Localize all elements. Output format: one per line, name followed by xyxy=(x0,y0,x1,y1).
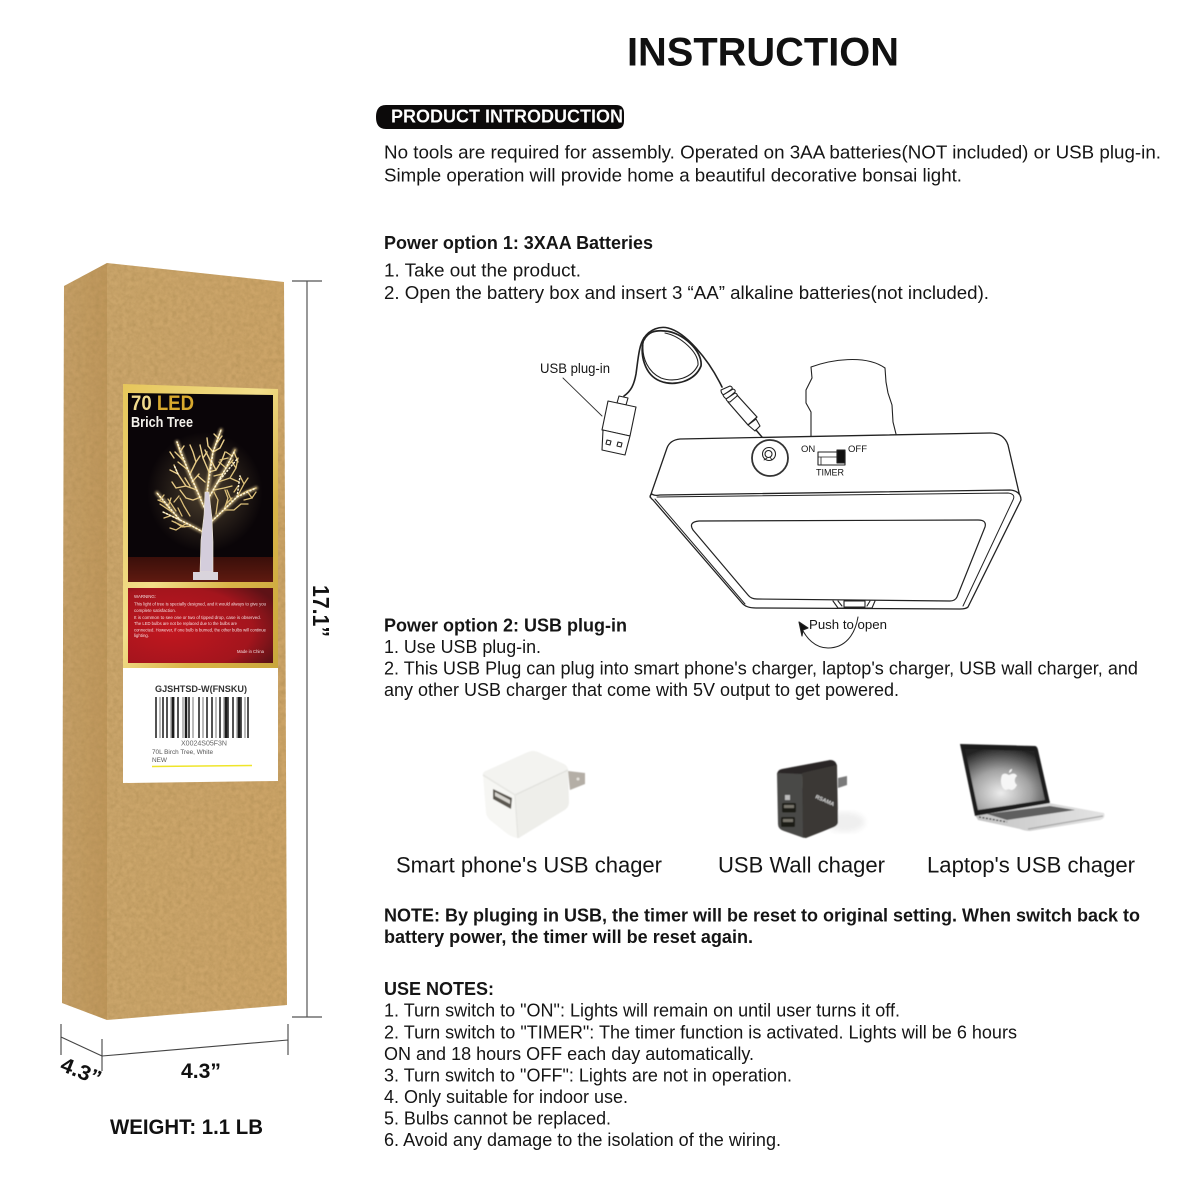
arrow: push to open xyxy=(799,617,887,648)
arrow: push to open: Push to open xyxy=(809,617,887,632)
box label: black tree photo: 70 LED xyxy=(131,392,194,415)
dimension: height 17.1 inches: 17.1” xyxy=(308,585,334,637)
switch: on off timer xyxy=(801,444,867,478)
battery door panel xyxy=(691,520,985,601)
switch: on off timer: ON xyxy=(801,444,815,455)
charger captions: USB Wall chager xyxy=(718,852,885,878)
box label: red warning panel: It is common to see one or two of tipped drop, case is observed. xyxy=(134,615,261,620)
switch: on off timer: OFF xyxy=(848,444,867,455)
dimension: width 4.3 inches xyxy=(102,1024,288,1083)
note xyxy=(384,906,1140,947)
use notes: 2. Turn switch to "TIMER": The timer function is activated. Lights will be 6 hours xyxy=(384,1022,1017,1042)
weight label: WEIGHT: 1.1 LB xyxy=(110,1116,263,1139)
section heading: product introduction: PRODUCT INTRODUCTION xyxy=(391,106,623,126)
icon: laptop xyxy=(960,744,1104,831)
diagram: battery box with USB cable xyxy=(540,327,1021,648)
icon: white phone charger xyxy=(483,751,585,838)
box label: red warning panel: WARNING: xyxy=(134,594,156,599)
text block: power option 2: 2. This USB Plug can plug into smart phone's charger, laptop's charger, USB wall charger, and xyxy=(384,658,1138,678)
text block: power option 2: any other USB charger that come with 5V output to get powered. xyxy=(384,680,899,700)
dimension: depth 4.3 inches xyxy=(57,1024,105,1090)
box label: black tree photo: Brich Tree xyxy=(131,414,193,431)
box label: FNSKU barcode sticker xyxy=(123,668,278,783)
text block: product introduction: No tools are required for assembly. Operated on 3AA batteries(NOT included) or USB plug-in. xyxy=(384,142,1161,162)
charger captions xyxy=(396,852,1135,878)
use notes xyxy=(384,979,1017,1150)
use notes: 4. Only suitable for indoor use. xyxy=(384,1087,628,1107)
barcode xyxy=(156,697,248,738)
use notes: ON and 18 hours OFF each day automatically. xyxy=(384,1044,754,1064)
switch: on off timer: TIMER xyxy=(816,468,844,478)
charger captions: Laptop's USB chager xyxy=(927,852,1135,878)
cable coil xyxy=(624,327,722,396)
box label: red warning panel: This light of tree is specially designed, and it would always to give you xyxy=(134,602,267,606)
box label: red warning panel: lighting. xyxy=(134,633,149,638)
text block: power option 2: Power option 2: USB plug-in xyxy=(384,614,627,636)
title: INSTRUCTION xyxy=(627,30,899,74)
dimension: height 17.1 inches xyxy=(292,281,334,1017)
label: USB plug-in: USB plug-in xyxy=(540,361,610,376)
box label: FNSKU barcode sticker: X0024S05F3N xyxy=(181,740,227,748)
door clip xyxy=(833,601,875,608)
icon: USB plug xyxy=(602,396,636,455)
text block: power option 2: 1. Use USB plug-in. xyxy=(384,637,541,657)
box label: red warning panel xyxy=(128,588,273,663)
box label: black tree photo xyxy=(128,392,273,582)
use notes: 6. Avoid any damage to the isolation of the wiring. xyxy=(384,1130,781,1150)
icon: DC socket xyxy=(752,440,788,476)
box label: FNSKU barcode sticker: 70L Birch Tree, White xyxy=(152,750,214,756)
box label: FNSKU barcode sticker: GJSHTSD-W(FNSKU) xyxy=(155,684,247,694)
tree illustration xyxy=(157,430,256,580)
text block: power option 1 xyxy=(384,233,989,303)
text block: power option 1: 1. Take out the product. xyxy=(384,260,581,280)
note: NOTE: By pluging in USB, the timer will be reset to original setting. When switch back to xyxy=(384,906,1140,926)
dimension: depth 4.3 inches: 4.3” xyxy=(57,1053,105,1090)
use notes: USE NOTES: xyxy=(384,979,494,999)
box label: FNSKU barcode sticker: NEW xyxy=(152,758,167,764)
icon: black wall charger xyxy=(777,760,865,838)
label: USB plug-in xyxy=(540,361,610,416)
icon: DC plug xyxy=(721,386,767,443)
charger captions: Smart phone's USB chager xyxy=(396,852,662,878)
tree base stump xyxy=(806,360,896,436)
box label: red warning panel: complete satisfaction. xyxy=(134,608,176,613)
text block: product introduction xyxy=(384,142,1161,186)
text block: power option 2 xyxy=(384,614,1138,700)
icon: black wall charger: RSAMA xyxy=(814,794,835,808)
dimension: width 4.3 inches: 4.3” xyxy=(181,1060,221,1083)
text block: power option 1: Power option 1: 3XAA Batteries xyxy=(384,233,653,253)
box label: red warning panel: connected. However, if one bulb is burned, the other bulbs will continue xyxy=(134,628,267,632)
use notes: 5. Bulbs cannot be replaced. xyxy=(384,1108,611,1128)
text block: product introduction: Simple operation will provide home a beautiful decorative bonsai light. xyxy=(384,166,962,186)
box label: gold frame xyxy=(123,384,278,668)
note: battery power, the timer will be reset again. xyxy=(384,927,753,947)
kraft product box xyxy=(62,263,287,1020)
box label: red warning panel: Made in China xyxy=(237,649,265,654)
box label: red warning panel: The LED bulbs are not be replaced due to the bulbs are xyxy=(134,621,238,626)
battery box body xyxy=(650,433,1021,609)
use notes: 1. Turn switch to "ON": Lights will remain on until user turns it off. xyxy=(384,1001,900,1021)
text block: power option 1: 2. Open the battery box and insert 3 “AA” alkaline batteries(not included). xyxy=(384,283,989,303)
use notes: 3. Turn switch to "OFF": Lights are not in operation. xyxy=(384,1065,792,1085)
